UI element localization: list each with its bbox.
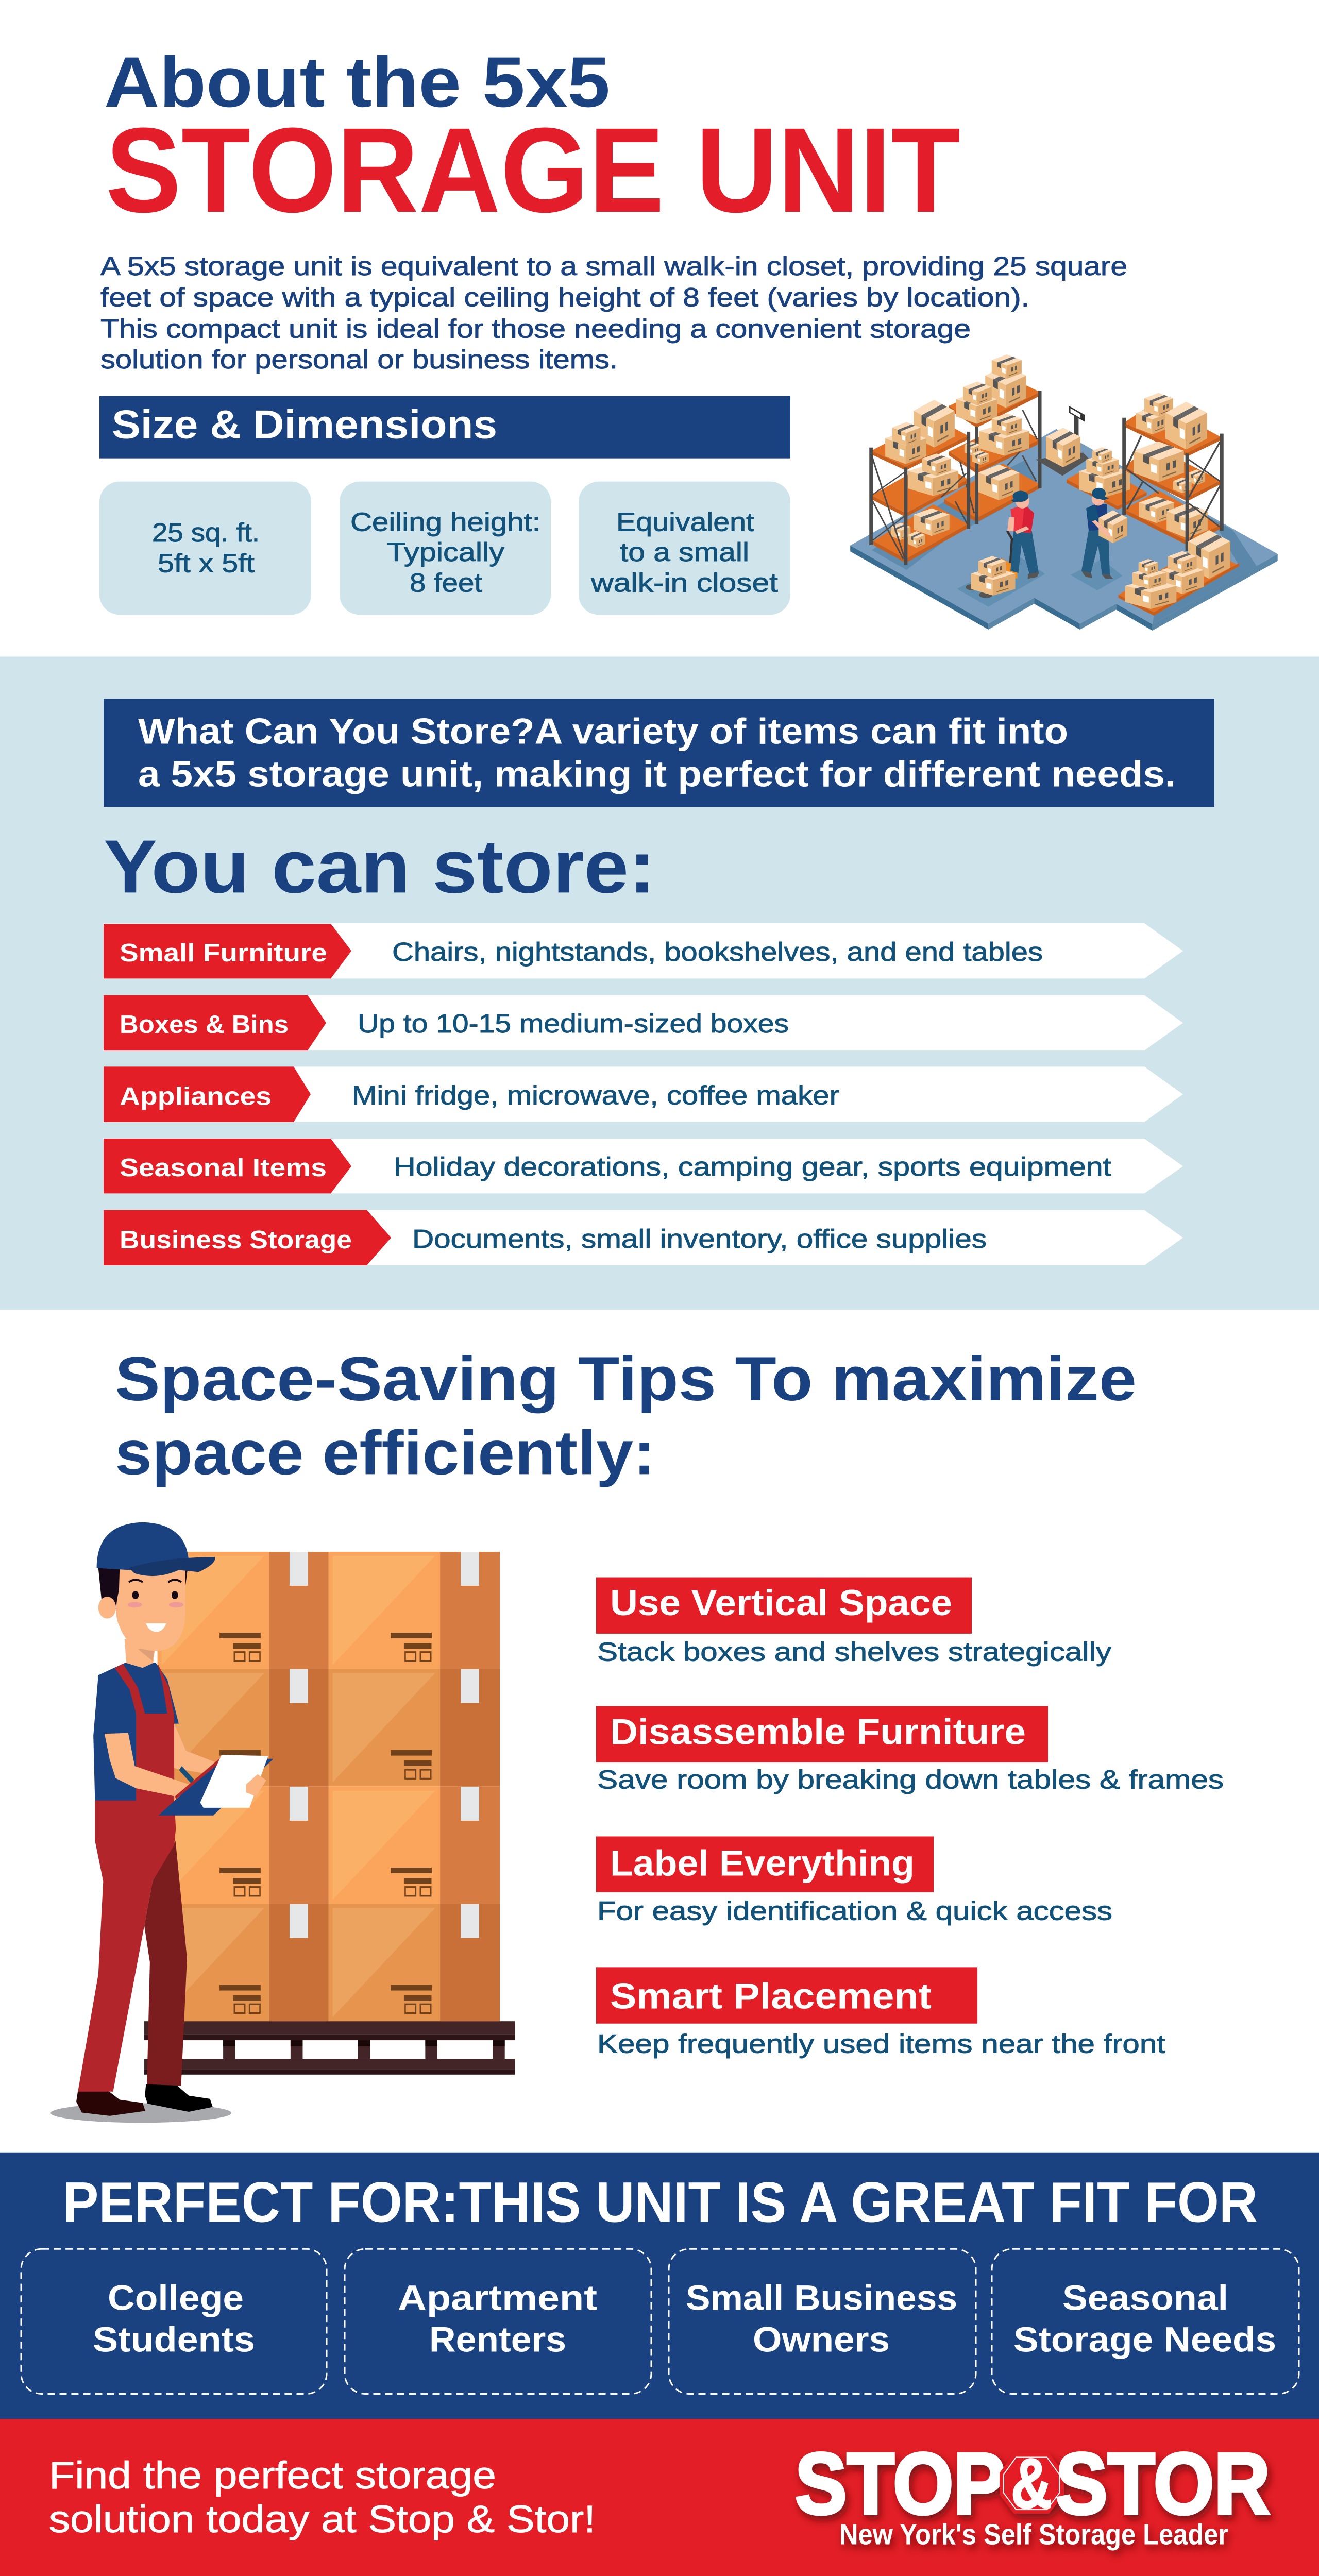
logo: Stop & Stor — [795, 2435, 1270, 2551]
row: business storage: Documents, small inventory, office supplies — [412, 1224, 987, 1253]
card: equivalent closet — [579, 482, 790, 615]
logo: Stop & Stor: New York's Self Storage Leader — [839, 2518, 1228, 2551]
row: small furniture: Small Furniture — [120, 939, 327, 967]
card: ceiling height — [340, 482, 551, 615]
row: business storage: Business Storage — [120, 1226, 352, 1254]
row: appliances — [104, 1066, 1183, 1122]
call to action text: solution today at Stop & Stor! — [49, 2498, 596, 2540]
card: equivalent closet: to a small — [620, 537, 749, 567]
banner: what can you store — [104, 699, 1214, 807]
card: college students: Students — [93, 2319, 255, 2359]
card: equivalent closet: walk-in closet — [590, 568, 778, 597]
banner: what can you store: a 5x5 storage unit, making it perfect for different needs. — [138, 754, 1176, 794]
panel: footer call to action — [0, 2419, 1319, 2576]
weighing scale — [1036, 406, 1089, 476]
rear rack — [944, 354, 1040, 524]
card: 25 sq. ft.: 25 sq. ft. — [152, 517, 260, 547]
card: 25 sq. ft.: 5ft x 5ft — [158, 548, 255, 578]
logo: Stop & Stor: STOR — [1056, 2435, 1270, 2532]
tip: use vertical space: Use Vertical Space — [610, 1583, 952, 1623]
card: equivalent closet: Equivalent — [616, 507, 754, 536]
intro text block — [100, 251, 1127, 374]
tip: label everything — [596, 1836, 1112, 1925]
tip: smart placement: Smart Placement — [610, 1976, 932, 2016]
card: apartment renters — [345, 2249, 651, 2394]
row: seasonal items: Seasonal Items — [120, 1154, 327, 1182]
tip: smart placement — [596, 1967, 1165, 2058]
row: boxes and bins: Up to 10-15 medium-sized boxes — [358, 1008, 789, 1038]
tip: use vertical space: Stack boxes and shelves strategically — [597, 1637, 1111, 1667]
row: seasonal items: Holiday decorations, camping gear, sports equipment — [394, 1152, 1111, 1181]
worker with pallet truck — [966, 491, 1039, 598]
row: boxes and bins — [104, 995, 1183, 1050]
row: appliances: Appliances — [120, 1082, 272, 1110]
card: ceiling height: Typically — [387, 537, 504, 567]
row: business storage — [104, 1210, 1183, 1265]
illustration: isometric warehouse — [850, 354, 1278, 631]
card: apartment renters: Renters — [429, 2319, 566, 2359]
logo: Stop & Stor: & — [1011, 2445, 1052, 2523]
panel: about the unit — [0, 0, 1319, 656]
panel: space-saving tips — [0, 1310, 1319, 2153]
right rack — [1124, 393, 1222, 551]
title: About the 5x5: About the 5x5 — [104, 42, 610, 122]
row: small furniture — [104, 923, 1183, 978]
card: seasonal storage needs — [992, 2249, 1299, 2394]
row: small furniture: Chairs, nightstands, bookshelves, and end tables — [392, 937, 1043, 967]
title: STORAGE UNIT: STORAGE UNIT — [106, 103, 960, 238]
panel: what can you store — [0, 656, 1319, 1310]
stacked boxes on pallet — [144, 1552, 515, 2075]
row: boxes and bins: Boxes & Bins — [120, 1010, 289, 1039]
card: small business owners: Small Business — [686, 2278, 957, 2317]
heading bar: Size & Dimensions: Size & Dimensions — [112, 401, 497, 447]
card: small business owners: Owners — [753, 2319, 890, 2359]
row: seasonal items — [104, 1139, 1183, 1193]
worker carrying box — [1081, 488, 1127, 579]
worker figure — [50, 1522, 274, 2123]
heading: space-saving tips: space efficiently: — [115, 1418, 655, 1487]
tip: disassemble furniture — [596, 1706, 1224, 1794]
panel: perfect for — [0, 2153, 1319, 2419]
intro text block: This compact unit is ideal for those needing a convenient storage — [100, 314, 971, 343]
tip: smart placement: Keep frequently used items near the front — [597, 2029, 1165, 2058]
row: appliances: Mini fridge, microwave, coffee maker — [352, 1080, 839, 1110]
heading: space-saving tips: Space-Saving Tips To maximize — [115, 1344, 1137, 1413]
tip: disassemble furniture: Disassemble Furniture — [610, 1712, 1026, 1753]
tip: label everything: Label Everything — [610, 1843, 915, 1884]
front-left rack — [871, 400, 969, 565]
card: college students: College — [108, 2278, 244, 2317]
logo: Stop & Stor: STOP — [795, 2435, 1005, 2532]
front-right pallet with boxes — [1119, 530, 1239, 616]
card: seasonal storage needs: Seasonal — [1062, 2278, 1228, 2317]
center shelf with boxes — [1067, 447, 1147, 510]
card: college students — [21, 2249, 327, 2394]
card: seasonal storage needs: Storage Needs — [1013, 2319, 1276, 2359]
card: apartment renters: Apartment — [398, 2278, 597, 2317]
banner: what can you store: What Can You Store?A variety of items can fit into — [138, 711, 1068, 752]
intro text block: A 5x5 storage unit is equivalent to a small walk-in closet, providing 25 square — [100, 251, 1127, 281]
heading: you can store: You can store: — [104, 825, 655, 909]
card: small business owners — [669, 2249, 976, 2394]
heading: space-saving tips — [115, 1344, 1137, 1487]
intro text block: solution for personal or business items. — [100, 344, 618, 374]
illustration: worker with boxes on pallet — [50, 1522, 515, 2123]
card: 25 sq. ft. — [99, 482, 311, 615]
call to action text: Find the perfect storage — [49, 2454, 496, 2497]
card: ceiling height: Ceiling height: — [350, 507, 540, 536]
tip: disassemble furniture: Save room by breaking down tables & frames — [597, 1765, 1224, 1794]
heading bar: Size & Dimensions — [99, 396, 790, 459]
card: ceiling height: 8 feet — [410, 568, 482, 597]
intro text block: feet of space with a typical ceiling height of 8 feet (varies by location). — [100, 282, 1029, 312]
tip: label everything: For easy identification & quick access — [597, 1896, 1112, 1925]
call to action text — [49, 2454, 596, 2540]
tip: use vertical space — [596, 1578, 1111, 1667]
